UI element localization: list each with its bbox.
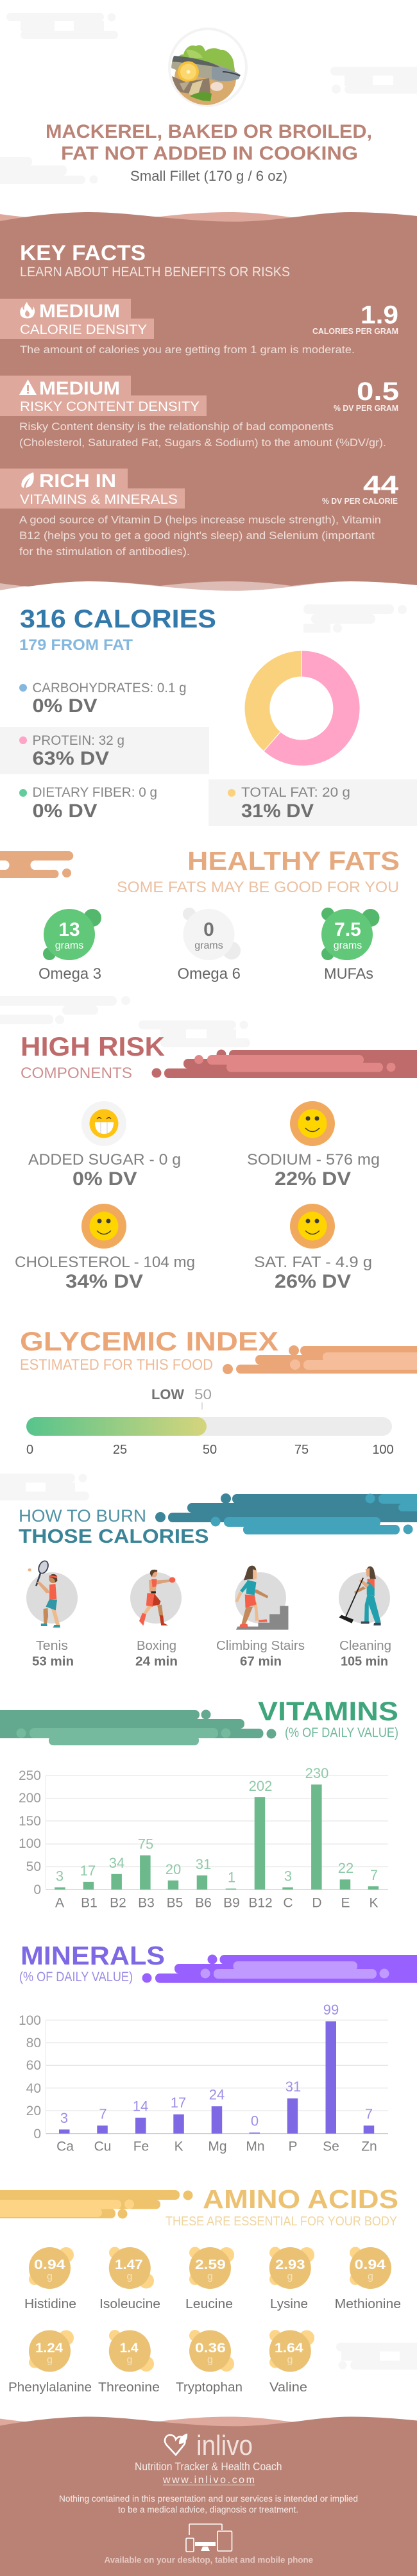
- activity: tennis: [26, 1560, 78, 1669]
- activity: boxing: [130, 1570, 182, 1669]
- heading: how to burn: HOW TO BURN: [19, 1506, 146, 1525]
- amino: phenylalanine: g: [47, 2354, 53, 2365]
- fact: rich in vitamins and minerals: VITAMINS & MINERALS: [20, 492, 178, 507]
- decoration: orange cloud: [223, 1345, 417, 1374]
- amino: threonine: [98, 2330, 160, 2395]
- fact: rich in vitamins and minerals: A good source of Vitamin D (helps increase muscle strength), Vitamin: [19, 514, 381, 526]
- nutrient: carbohydrates: 0% DV: [32, 695, 98, 717]
- bar chart: vitamins: B3: [138, 1896, 155, 1910]
- amino: lysine: Lysine: [270, 2297, 308, 2311]
- amino: leucine: 2.59: [195, 2257, 226, 2272]
- bar chart: minerals: Mg: [208, 2140, 227, 2154]
- gauge scale: [26, 1443, 394, 1457]
- icon: leaf: [21, 472, 34, 488]
- availability note: Available on your desktop, tablet and mobile phone: [104, 2555, 313, 2565]
- badge: MUFAs: [321, 908, 380, 983]
- logo: inlivo: [165, 2430, 253, 2461]
- gauge label: low 50: 50: [194, 1386, 212, 1402]
- bar chart: vitamins: 34: [109, 1855, 124, 1871]
- amino: lysine: g: [287, 2272, 293, 2282]
- fact: risky content density: (Cholesterol, Saturated Fat, Sugars & Sodium) to the amount (%DV/gr).: [19, 436, 386, 449]
- amino: leucine: g: [207, 2272, 213, 2282]
- nutrient: protein: 63% DV: [32, 748, 109, 769]
- fact: risky content density: % DV PER GRAM: [334, 404, 398, 413]
- bar chart: minerals: Ca: [56, 2140, 74, 2154]
- bar chart: vitamins: 75: [138, 1836, 153, 1852]
- heading: key facts: LEARN ABOUT HEALTH BENEFITS OR RISKS: [20, 264, 290, 279]
- amino: valine: [269, 2330, 314, 2395]
- panel: amino acids: [0, 2184, 401, 2395]
- bar chart: minerals: 80: [26, 2036, 41, 2050]
- fact: rich in vitamins and minerals: 44: [363, 471, 399, 499]
- amino: histidine: g: [47, 2272, 53, 2282]
- heading: vitamins: VITAMINS: [258, 1696, 398, 1726]
- icon: tennis player: [28, 1560, 60, 1627]
- bar chart: minerals: 20: [26, 2104, 41, 2118]
- bar chart: minerals: 40: [26, 2081, 41, 2096]
- icon: woman climbing stairs: [235, 1566, 288, 1630]
- bar chart: minerals: P: [288, 2140, 298, 2154]
- fact: risky content density: Risky Content density is the relationship of bad components: [19, 420, 334, 433]
- bar chart: minerals: 7: [99, 2106, 107, 2122]
- bar chart: minerals: 3: [60, 2110, 68, 2126]
- amino: threonine: g: [127, 2354, 132, 2365]
- amino: isoleucine: g: [127, 2272, 132, 2282]
- nutrient: total fat: TOTAL FAT: 20 g: [241, 785, 350, 800]
- bar chart: minerals: K: [174, 2140, 183, 2154]
- item: sodium: SODIUM - 576 mg: [247, 1151, 380, 1168]
- item: saturated fat: SAT. FAT - 4.9 g: [254, 1254, 372, 1271]
- amino: tryptophan: Tryptophan: [176, 2381, 243, 2395]
- panel: calories: [0, 605, 417, 826]
- donut chart: [244, 651, 360, 766]
- amino: leucine: Leucine: [185, 2297, 233, 2311]
- bar chart: vitamins: 17: [80, 1863, 96, 1879]
- icon: boxer: [139, 1570, 175, 1625]
- bar chart: minerals: Fe: [133, 2140, 149, 2154]
- activity: tennis: Tenis: [36, 1639, 68, 1653]
- title: MACKEREL, BAKED OR BROILED,: [46, 121, 372, 142]
- item: sodium: 22% DV: [275, 1168, 351, 1190]
- activity: cleaning: Cleaning: [339, 1639, 391, 1653]
- amino: valine: Valine: [269, 2381, 307, 2395]
- panel: high risk components: [15, 1031, 417, 1292]
- gauge scale: 100: [372, 1443, 394, 1457]
- bar chart: vitamins: B12: [248, 1896, 273, 1910]
- item: saturated fat: 26% DV: [275, 1271, 351, 1292]
- fact: calorie density: 1.9: [361, 301, 398, 329]
- fact: risky content density: [0, 376, 399, 449]
- bar chart: minerals: 17: [171, 2095, 186, 2111]
- icon: plate of mackerel: [169, 29, 246, 106]
- amino: isoleucine: Isoleucine: [99, 2297, 160, 2311]
- amino: histidine: 0.94: [34, 2257, 65, 2272]
- bar chart: minerals: 14: [133, 2098, 148, 2114]
- heading: glycemic index: GLYCEMIC INDEX: [20, 1326, 278, 1356]
- item: added sugar: ADDED SUGAR - 0 g: [28, 1151, 181, 1168]
- panel: key facts: [0, 212, 417, 591]
- decoration: teal cloud: [155, 1493, 417, 1534]
- subheading: SOME FATS MAY BE GOOD FOR YOU: [117, 879, 399, 896]
- badge: omega 3: 13: [58, 919, 80, 940]
- subheading: calories from fat: 179 FROM FAT: [19, 636, 133, 654]
- fact: calorie density: CALORIES PER GRAM: [312, 327, 398, 336]
- badge: omega 3: [38, 909, 101, 983]
- badge: omega 3: Omega 3: [38, 965, 101, 983]
- bar chart: vitamins: B6: [195, 1896, 212, 1910]
- nutrient: carbohydrates: CARBOHYDRATES: 0.1 g: [32, 681, 186, 695]
- badge: omega 6: [177, 908, 241, 983]
- bar chart: vitamins: 230: [305, 1765, 328, 1781]
- amino: histidine: [24, 2247, 76, 2311]
- subheading: percent of daily value: (% OF DAILY VALUE): [285, 1725, 398, 1740]
- amino: tryptophan: g: [207, 2354, 213, 2365]
- panel: glycemic index: [20, 1326, 417, 1457]
- nutrient: dietary fiber: [19, 785, 157, 822]
- gauge scale: 75: [294, 1443, 309, 1457]
- amino: leucine: [185, 2247, 234, 2311]
- bar chart: vitamins: 3: [56, 1868, 64, 1884]
- activity: boxing: Boxing: [137, 1639, 176, 1653]
- panel: how to burn those calories: [19, 1493, 417, 1669]
- amino: valine: 1.64: [275, 2341, 303, 2356]
- fact: risky content density: MEDIUM: [39, 378, 120, 399]
- bar chart: vitamins: 50: [26, 1859, 41, 1874]
- bar chart: vitamins: 202: [249, 1778, 272, 1794]
- bar chart: vitamins: [19, 1765, 388, 1910]
- amino: histidine: Histidine: [24, 2297, 76, 2311]
- fact: risky content density: RISKY CONTENT DENSITY: [20, 399, 200, 414]
- bar chart: minerals: 60: [26, 2058, 41, 2073]
- badge: omega 6: 0: [203, 919, 214, 940]
- bar chart: vitamins: 22: [338, 1860, 353, 1876]
- decoration: green cloud: [0, 1710, 276, 1745]
- panel: vitamins: [0, 1696, 398, 1910]
- activity: tennis: 53 min: [32, 1655, 74, 1669]
- bar chart: minerals: 31: [285, 2079, 301, 2095]
- amino: phenylalanine: [8, 2331, 92, 2395]
- amino: tryptophan: 0.36: [195, 2341, 226, 2356]
- icon: flame: [20, 302, 35, 318]
- bar chart: minerals: 0: [33, 2127, 41, 2141]
- panel: healthy fats: [0, 846, 400, 983]
- item: added sugar: [28, 1101, 181, 1190]
- item: cholesterol: CHOLESTEROL - 104 mg: [15, 1254, 195, 1271]
- activity: climbing stairs: Climbing Stairs: [216, 1639, 305, 1653]
- bar chart: vitamins: B9: [223, 1896, 240, 1910]
- icon: woman sweeping: [339, 1566, 381, 1625]
- bar chart: vitamins: 150: [19, 1814, 41, 1829]
- bar chart: vitamins: 31: [196, 1856, 211, 1872]
- bar chart: vitamins: K: [369, 1896, 379, 1910]
- bar chart: vitamins: B1: [81, 1896, 98, 1910]
- bar chart: minerals: Cu: [94, 2140, 111, 2154]
- gauge scale: 25: [113, 1443, 127, 1457]
- subheading: ESTIMATED FOR THIS FOOD: [20, 1356, 213, 1374]
- item: saturated fat: [254, 1204, 372, 1292]
- nutrient: carbohydrates: [19, 681, 186, 717]
- amino: threonine: 1.4: [120, 2341, 139, 2356]
- bar chart: vitamins: B5: [167, 1896, 183, 1910]
- amino: phenylalanine: 1.24: [35, 2341, 63, 2356]
- badge: omega 6: Omega 6: [177, 965, 241, 983]
- title: [46, 121, 372, 164]
- amino: methionine: [335, 2247, 401, 2311]
- fact: calorie density: CALORIE DENSITY: [20, 322, 147, 337]
- bar chart: vitamins: 100: [19, 1836, 41, 1851]
- heading: 316 calories: 316 CALORIES: [20, 605, 216, 633]
- gauge scale: 50: [203, 1443, 217, 1457]
- badge: MUFAs: MUFAs: [324, 965, 373, 983]
- item: sodium: [247, 1101, 380, 1190]
- activity: climbing stairs: 67 min: [240, 1655, 282, 1669]
- bar chart: minerals: Se: [323, 2140, 339, 2154]
- bar chart: vitamins: C: [283, 1896, 293, 1910]
- bar chart: minerals: 99: [323, 2002, 339, 2018]
- activity: cleaning: [339, 1566, 391, 1669]
- panel: minerals: [19, 1941, 417, 2154]
- fact: rich in vitamins and minerals: % DV PER CALORIE: [322, 497, 398, 506]
- title: FAT NOT ADDED IN COOKING: [61, 143, 358, 164]
- item: cholesterol: [15, 1204, 195, 1292]
- header: food photo and title: [46, 29, 372, 184]
- activity: climbing stairs: [216, 1566, 305, 1669]
- logo: inlivo: inlivo: [196, 2430, 253, 2461]
- fact: rich in vitamins and minerals: for the stimulation of antibodies).: [19, 545, 190, 558]
- disclaimer: [59, 2493, 358, 2514]
- disclaimer: to be a medical advice, diagnosis or treatment.: [118, 2504, 298, 2514]
- heading: amino acids: AMINO ACIDS: [203, 2184, 398, 2214]
- amino: lysine: [269, 2247, 314, 2311]
- fact: risky content density: 0.5: [357, 378, 399, 406]
- gauge label: low 50: LOW: [151, 1386, 184, 1402]
- fact: rich in vitamins and minerals: [0, 469, 399, 558]
- amino: methionine: Methionine: [335, 2297, 401, 2311]
- bar chart: vitamins: A: [55, 1896, 64, 1910]
- subheading: THESE ARE ESSENTIAL FOR YOUR BODY: [166, 2215, 397, 2229]
- gauge scale: 0: [26, 1443, 33, 1457]
- decoration: yellow cloud: [0, 2190, 192, 2219]
- nutrient: protein: PROTEIN: 32 g: [32, 733, 124, 748]
- decoration: red cloud: [151, 1050, 417, 1078]
- heading: healthy fats: HEALTHY FATS: [187, 846, 400, 876]
- badge: MUFAs: 7.5: [334, 919, 361, 940]
- bar chart: minerals: Zn: [361, 2140, 377, 2154]
- bar chart: vitamins: 7: [370, 1867, 378, 1883]
- amino: isoleucine: [99, 2247, 160, 2311]
- badge: omega 6: grams: [194, 940, 223, 951]
- activity: boxing: 24 min: [135, 1655, 178, 1669]
- item: added sugar: 0% DV: [72, 1168, 137, 1190]
- bar chart: vitamins: D: [312, 1896, 322, 1910]
- bar chart: minerals: 24: [209, 2087, 225, 2103]
- item: cholesterol: 34% DV: [65, 1271, 143, 1292]
- heading: key facts: [20, 241, 290, 279]
- gauge label: low 50: [151, 1386, 212, 1409]
- bar chart: minerals: [19, 2002, 388, 2154]
- bar chart: minerals: 7: [365, 2106, 373, 2122]
- nutrient: dietary fiber: 0% DV: [32, 801, 98, 822]
- bar chart: vitamins: E: [341, 1896, 350, 1910]
- bar chart: vitamins: 0: [33, 1882, 41, 1897]
- heading: those calories: THOSE CALORIES: [19, 1525, 209, 1547]
- amino: lysine: 2.93: [275, 2257, 305, 2272]
- amino: methionine: g: [368, 2272, 373, 2282]
- icon: devices: [186, 2524, 232, 2552]
- amino: tryptophan: [176, 2330, 243, 2395]
- decoration: orange cloud: [0, 851, 73, 878]
- amino: phenylalanine: Phenylalanine: [8, 2381, 92, 2395]
- footer: [0, 2416, 417, 2576]
- badge: MUFAs: grams: [334, 940, 362, 951]
- fact: rich in vitamins and minerals: RICH IN: [39, 471, 116, 492]
- bar chart: minerals: 100: [19, 2013, 41, 2028]
- nutrient: total fat: [208, 779, 417, 826]
- amino: isoleucine: 1.47: [115, 2257, 142, 2272]
- gauge bar: [26, 1417, 392, 1436]
- decoration: purple cloud: [142, 1955, 417, 1983]
- bar chart: vitamins: 3: [284, 1868, 292, 1884]
- icon: warning triangle: [19, 379, 37, 395]
- heading: high risk: HIGH RISK: [21, 1031, 165, 1061]
- nutrient: dietary fiber: DIETARY FIBER: 0 g: [32, 785, 157, 800]
- amino: threonine: Threonine: [98, 2381, 160, 2395]
- subheading: components: COMPONENTS: [21, 1065, 132, 1082]
- website link: www.inlivo.com: [162, 2475, 255, 2486]
- bar chart: minerals: Mn: [246, 2140, 265, 2154]
- serving size: Small Fillet (170 g / 6 oz): [130, 168, 287, 184]
- fact: rich in vitamins and minerals: B12 (helps you to get a good night's sleep) and Selenium (important: [19, 529, 375, 542]
- bar chart: vitamins: 200: [19, 1791, 41, 1806]
- bar chart: vitamins: 250: [19, 1768, 41, 1783]
- bar chart: vitamins: 20: [166, 1861, 181, 1877]
- subheading: percent of daily value: (% OF DAILY VALUE): [19, 1970, 133, 1984]
- bar chart: minerals: 0: [251, 2113, 259, 2129]
- fact: calorie density: [0, 299, 398, 356]
- fact: calorie density: The amount of calories you are getting from 1 gram is moderate.: [20, 344, 355, 356]
- disclaimer: Nothing contained in this presentation and our services is intended or implied: [59, 2493, 358, 2504]
- nutrient: protein: [0, 727, 209, 774]
- tagline: Nutrition Tracker & Health Coach: [135, 2460, 282, 2473]
- amino: valine: g: [287, 2354, 293, 2365]
- heading: key facts: KEY FACTS: [20, 241, 146, 265]
- bar chart: vitamins: B2: [110, 1896, 126, 1910]
- nutrient: total fat: 31% DV: [241, 801, 314, 822]
- bar chart: vitamins: 1: [228, 1869, 235, 1886]
- amino: methionine: 0.94: [355, 2257, 386, 2272]
- fact: calorie density: MEDIUM: [39, 301, 120, 322]
- badge: omega 3: grams: [55, 940, 83, 951]
- heading: minerals: MINERALS: [21, 1941, 165, 1970]
- activity: cleaning: 105 min: [341, 1655, 388, 1669]
